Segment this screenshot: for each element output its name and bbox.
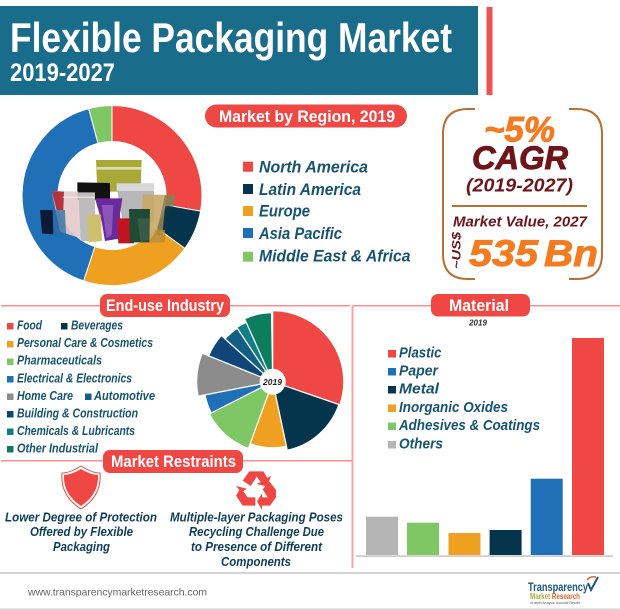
text: lower degree of protection: [5, 510, 157, 554]
text: lower degree of protection: Offered by Flexible: [30, 524, 133, 539]
text: lower degree of protection: Lower Degree of Protection: [5, 510, 157, 525]
text: recycling challenge: to Presence of Different: [191, 539, 323, 554]
legend: materials: Others: [399, 435, 443, 452]
text: lower degree of protection: Packaging: [53, 539, 110, 554]
text: recycling challenge: Components: [221, 554, 291, 569]
legend: materials: Metal: [399, 381, 440, 398]
legend: end-use industries: Electrical & Electronics: [17, 372, 132, 386]
legend: end-use industries: Food: [17, 318, 42, 332]
legend: materials: Inorganic Oxides: [399, 399, 508, 416]
legend: end-use industries: Building & Construction: [17, 406, 138, 420]
pie chart: end-use industry: [197, 311, 344, 450]
logo: Transparency Market Research: Market Research: [530, 592, 580, 601]
logo: Transparency Market Research: Transparency: [528, 580, 588, 594]
accent bar: [486, 7, 492, 95]
callout: CAGR and market value: ~5%: [484, 111, 555, 150]
legend: regions: North America: [259, 157, 368, 176]
legend: regions: Asia Pacific: [258, 224, 342, 243]
bar chart: material: [356, 338, 613, 557]
legend: end-use industries: Other Industrial: [17, 442, 98, 456]
callout: CAGR and market value: 535: [469, 233, 540, 274]
legend: regions: Latin America: [259, 180, 361, 199]
chart year label: 2019: [468, 319, 487, 328]
callout: CAGR and market value: Market Value, 2027: [453, 214, 588, 231]
footer website url: www.transparencymarketresearch.com: [27, 587, 207, 599]
legend: materials: Plastic: [399, 344, 442, 361]
legend: end-use industries: Pharmaceuticals: [17, 354, 102, 368]
logo: Transparency Market Research: [528, 577, 598, 605]
legend: materials: [388, 344, 540, 452]
legend: materials: Paper: [399, 363, 439, 380]
legend: end-use industries: Beverages: [71, 318, 123, 332]
heading: material: [431, 294, 530, 316]
legend: end-use industries: Home Care: [17, 389, 73, 403]
title: Flexible Packaging Market: [10, 14, 452, 61]
callout: CAGR and market value: ~US$: [450, 232, 464, 269]
heading: end-use industry: End-use Industry: [106, 297, 225, 315]
text: recycling challenge: [170, 510, 343, 569]
legend: end-use industries: Personal Care & Cosmetics: [17, 336, 153, 350]
subtitle years: 2019-2027: [10, 59, 115, 87]
callout: CAGR and market value: CAGR: [472, 140, 568, 176]
legend: materials: Adhesives & Coatings: [398, 417, 540, 434]
legend: regions: Middle East & Africa: [259, 247, 410, 266]
pie chart: end-use industry: 2019: [262, 377, 282, 387]
legend: regions: Europe: [259, 202, 310, 221]
callout: CAGR and market value: Bn: [544, 233, 598, 274]
title banner: [0, 6, 478, 95]
donut chart: market by region: [22, 106, 202, 285]
heading: market by region: Market by Region, 2019: [219, 108, 395, 126]
logo: Transparency Market Research: In-depth Analysis. Accurate Results: [530, 601, 580, 605]
heading: material: Material: [449, 297, 509, 315]
icon: shield: [62, 466, 100, 509]
icon: packaging pouches photo: [40, 160, 175, 243]
callout: CAGR and market value: [443, 109, 602, 279]
heading: market restraints: Market Restraints: [111, 453, 236, 471]
legend: end-use industries: Chemicals & Lubricants: [17, 424, 135, 438]
legend: regions: [243, 157, 410, 266]
callout: CAGR and market value: (2019-2027): [466, 176, 573, 196]
text: recycling challenge: Recycling Challenge Due: [189, 524, 324, 539]
icon: recycling arrows: [236, 471, 276, 510]
legend: end-use industries: Automotive: [93, 389, 155, 403]
text: recycling challenge: Multiple-layer Packaging Poses: [170, 510, 343, 525]
legend: end-use industries: [7, 318, 155, 456]
